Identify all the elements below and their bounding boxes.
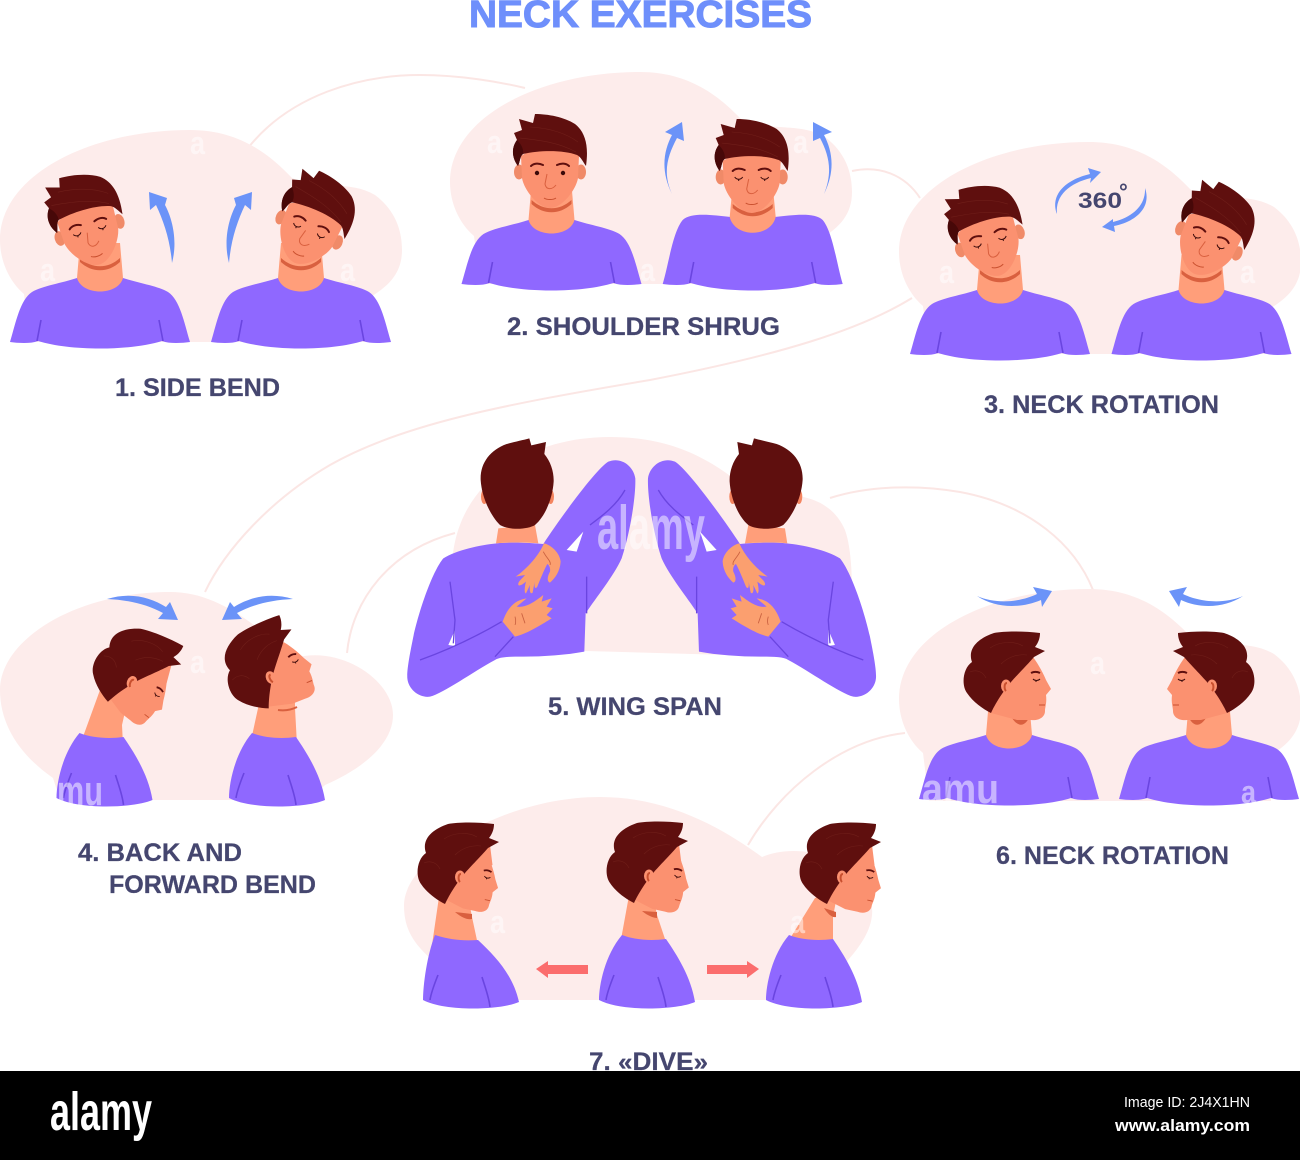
panel: 7. dive bbox=[404, 797, 889, 1076]
watermark text: a bbox=[793, 124, 808, 160]
background blob bbox=[404, 797, 872, 1000]
figure: relaxed shoulders bbox=[462, 114, 642, 290]
panel: 4. back and forward bend bbox=[0, 592, 393, 899]
arrow: up right bbox=[227, 192, 252, 263]
label: 7. «DIVE» bbox=[589, 1048, 708, 1076]
figure: head forward bbox=[766, 822, 889, 1008]
figure: head tilted right bbox=[1112, 173, 1292, 360]
watermark text: a bbox=[340, 252, 355, 288]
watermark text: a bbox=[790, 904, 805, 940]
panel: 5. wing span bbox=[407, 437, 876, 721]
connector lines bbox=[205, 75, 1093, 845]
arrow: up left bbox=[149, 192, 174, 263]
arrow: up right bbox=[813, 122, 832, 194]
figure: head tilted right bbox=[211, 162, 391, 348]
figure: head turned right bbox=[919, 632, 1099, 806]
figure: head tilted left bbox=[10, 164, 190, 348]
arrow: right and down bbox=[107, 596, 178, 620]
label: 3. NECK ROTATION bbox=[984, 391, 1219, 419]
panel: 3. neck rotation bbox=[899, 142, 1300, 419]
figure: right wing span bbox=[648, 438, 876, 697]
label: FORWARD BEND bbox=[109, 871, 316, 899]
label: 1. SIDE BEND bbox=[115, 374, 280, 402]
footer bar bbox=[0, 1071, 1300, 1160]
panel: 2. shoulder shrug bbox=[450, 72, 852, 341]
label: 4. BACK AND bbox=[78, 839, 242, 867]
arrow: left bbox=[536, 961, 588, 978]
background blob bbox=[450, 72, 852, 284]
arrow: leftward bbox=[1169, 587, 1243, 607]
figure: head back bbox=[418, 822, 519, 1008]
watermark text: a bbox=[939, 254, 954, 290]
background blob bbox=[452, 437, 852, 657]
watermark text: mu bbox=[57, 767, 103, 814]
label: 2. SHOULDER SHRUG bbox=[507, 313, 780, 341]
watermark text: alamy bbox=[597, 494, 705, 563]
label bbox=[78, 839, 316, 899]
watermark text: a bbox=[487, 124, 502, 160]
label: 5. WING SPAN bbox=[548, 693, 722, 721]
arrow: up left bbox=[664, 122, 684, 194]
figure: head neutral bbox=[599, 822, 697, 1008]
watermark text: a bbox=[1090, 645, 1105, 681]
figure: head bent back bbox=[209, 612, 325, 806]
background blob bbox=[0, 130, 402, 342]
arrow: rightward bbox=[977, 587, 1052, 607]
arrow: left and down bbox=[222, 596, 293, 620]
watermark text: a bbox=[190, 125, 205, 161]
icon: 360 rotation arrows bbox=[1055, 168, 1147, 232]
watermark text: a bbox=[1240, 254, 1255, 290]
watermark text: a bbox=[190, 644, 205, 680]
figure: left wing span bbox=[407, 438, 635, 697]
icon: 360 rotation arrows: ° bbox=[1119, 179, 1128, 204]
figure: raised shoulders bbox=[663, 119, 843, 290]
watermark text: a bbox=[1241, 774, 1256, 810]
panel: 1. side bend bbox=[0, 130, 402, 402]
background blob bbox=[899, 589, 1300, 801]
watermark text: a bbox=[40, 252, 55, 288]
background blob bbox=[0, 592, 393, 800]
figure: head bent forward bbox=[56, 616, 189, 806]
arrow: right bbox=[707, 961, 759, 978]
label: 6. NECK ROTATION bbox=[996, 842, 1229, 870]
footer logo: alamy bbox=[50, 1082, 152, 1142]
watermark text: a bbox=[490, 904, 505, 940]
website: www.alamy.com bbox=[1114, 1116, 1250, 1135]
image id: Image ID: 2J4X1HN bbox=[1124, 1094, 1250, 1111]
panel: 6. neck rotation bbox=[899, 587, 1300, 870]
figure: head turned left bbox=[1119, 632, 1299, 806]
figure: head tilted left bbox=[910, 175, 1090, 360]
watermark text: a bbox=[640, 252, 655, 288]
watermark text bbox=[40, 124, 1256, 940]
background blob bbox=[899, 142, 1300, 354]
watermark text: amu bbox=[922, 765, 999, 812]
icon: 360 rotation arrows: 360 bbox=[1078, 188, 1122, 213]
